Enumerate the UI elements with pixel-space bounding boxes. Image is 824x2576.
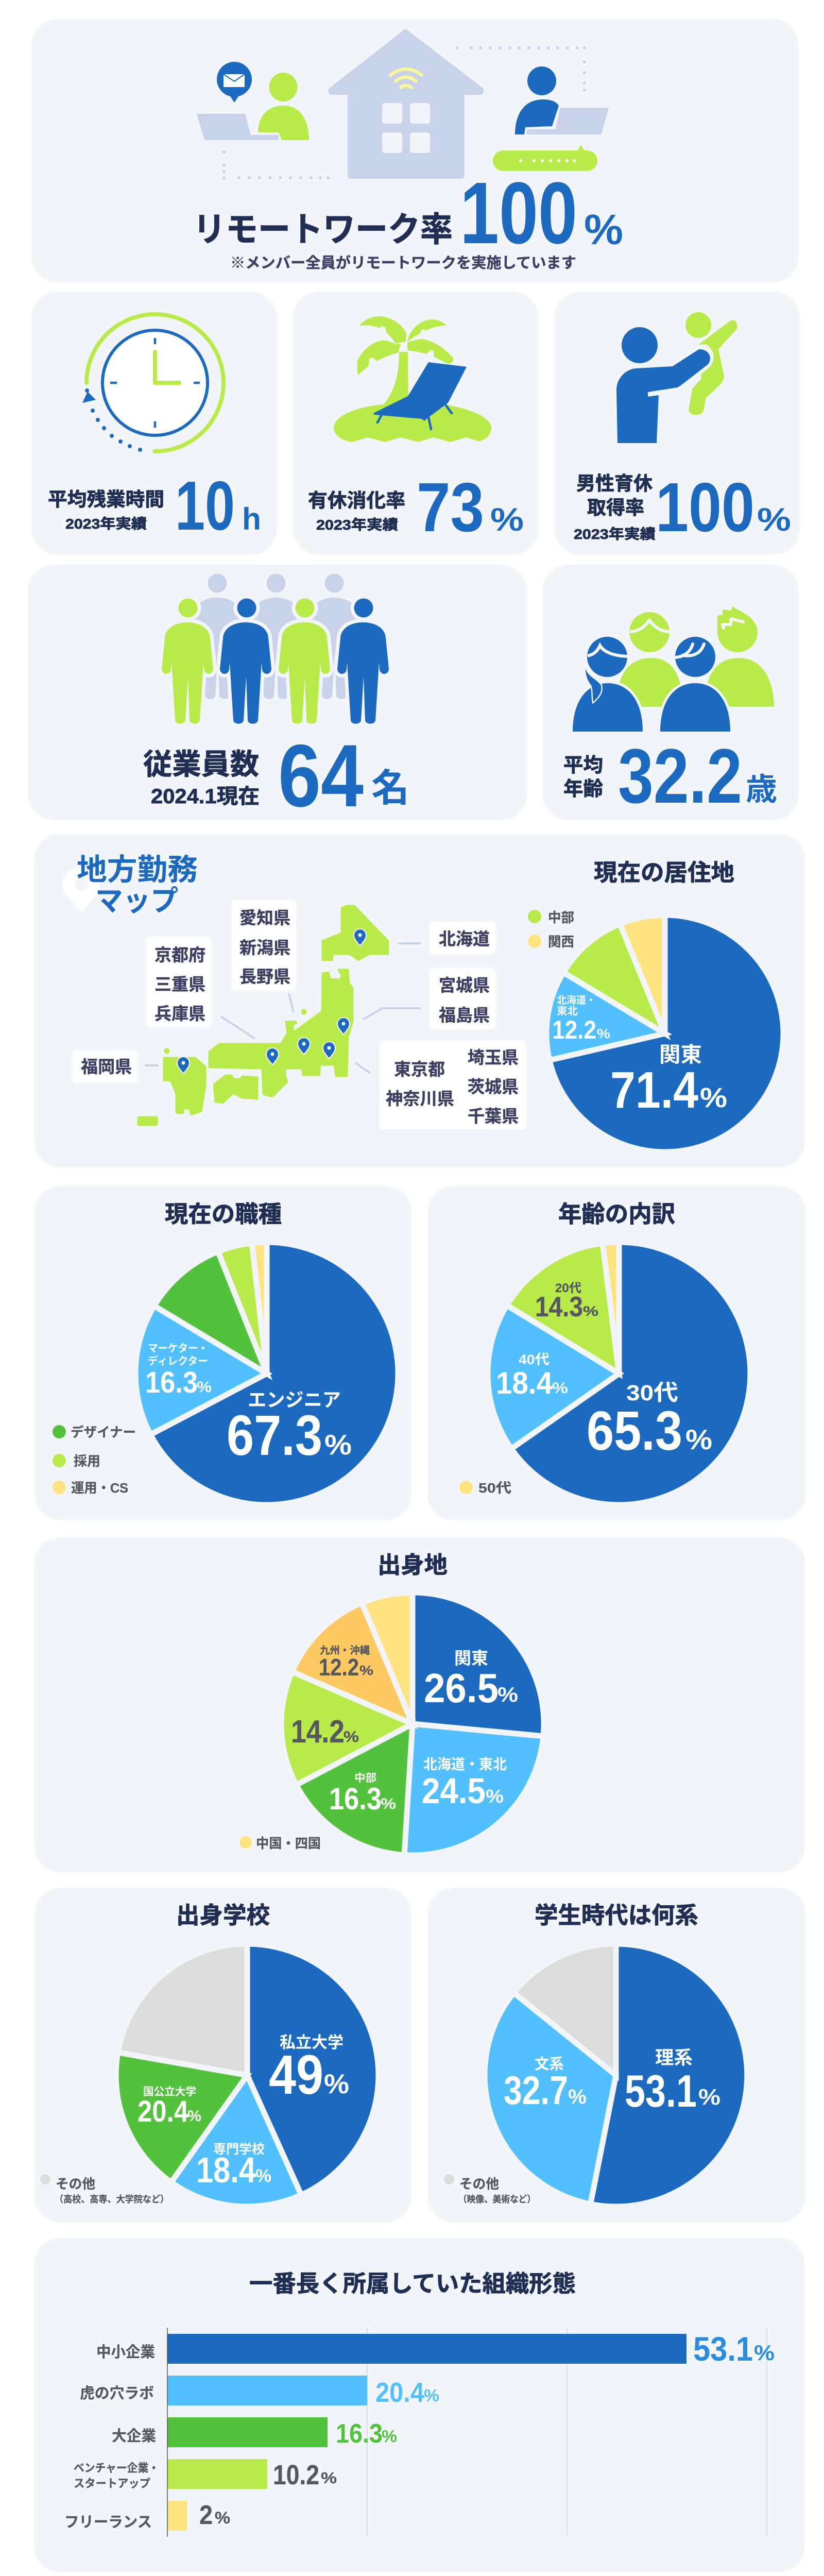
bar values: 53.1 [693, 2330, 753, 2368]
slice label: Hokkaido Tohoku 12.2%: % [597, 1026, 610, 1041]
label box: Kyoto, Mie, Hyogo [146, 937, 211, 1027]
slice label: marketer director 16.3%: % [197, 1379, 212, 1396]
slice label: Kanto 71.4%: % [700, 1082, 727, 1113]
label box: Kanto prefectures: 茨城県 [468, 1077, 519, 1096]
label [574, 473, 656, 542]
slice label: marketer director 16.3%: ディレクター [148, 1355, 208, 1367]
slice label: vocational school 18.4%: 専門学校 [213, 2142, 265, 2157]
slice label: public university 20.4%: % [187, 2108, 201, 2125]
slice label: public university 20.4%: 国公立大学 [143, 2086, 196, 2098]
slice label: Hokkaido Tohoku 12.2%: 12.2 [552, 1015, 596, 1044]
label [563, 755, 603, 800]
slice label: Kanto 26.5%: 関東 [454, 1649, 488, 1668]
legend: residence: 関西 [548, 934, 574, 950]
note: ※メンバー全員がリモートワークを実施しています [230, 254, 576, 272]
slice label: humanities 32.7%: 文系 [535, 2056, 564, 2073]
slice label: Hokkaido Tohoku 12.2%: 北海道・ [557, 994, 596, 1006]
slice label: 14.2%: 14.2 [291, 1714, 345, 1750]
slice label: Hokkaido Tohoku 12.2% [552, 994, 610, 1044]
panel: age breakdown [427, 1186, 805, 1520]
label box: Kanto prefectures: 東京都 [394, 1060, 445, 1079]
heading: regional map: 地方勤務 [77, 853, 198, 887]
bar labels: ベンチャー企業・ [74, 2462, 159, 2475]
bar labels: スタートアップ [74, 2477, 150, 2490]
bar values: 2 [199, 2500, 213, 2530]
bar values: % [321, 2469, 337, 2487]
legend: job types [53, 1425, 136, 1496]
slice label: 20s 14.3%: 14.3 [535, 1291, 583, 1323]
slice label: Kanto 26.5%: 26.5 [424, 1665, 499, 1711]
label: 平均残業時間 [48, 489, 164, 510]
slice label: 30s 65.3%: % [685, 1423, 712, 1455]
value: 64: 名 [371, 767, 409, 809]
slice label: marketer director 16.3%: マーケター・ [148, 1343, 208, 1354]
heading: current residence: 現在の居住地 [594, 859, 734, 886]
pie chart: academic field [485, 1944, 747, 2207]
value: 32.2: 歳 [746, 772, 777, 807]
label box: Miyagi, Fukushima: 宮城県 [439, 976, 490, 995]
bar values: % [382, 2427, 397, 2446]
slice label: Chubu 16.3%: % [381, 1795, 396, 1812]
panel: headcount [28, 565, 527, 825]
label box: Aichi, Niigata, Nagano: 長野県 [239, 967, 290, 986]
label box: Kanto prefectures: 埼玉県 [468, 1048, 519, 1067]
bar values: 20.4 [375, 2377, 424, 2408]
slice label: private university 49%: % [324, 2069, 349, 2099]
label [48, 489, 164, 532]
bar labels [64, 2344, 159, 2531]
heading: school: 出身学校 [176, 1902, 270, 1928]
label box: Aichi, Niigata, Nagano [232, 900, 296, 990]
slice label: engineer 67.3%: 67.3 [227, 1404, 322, 1467]
slice label: vocational school 18.4%: 18.4 [196, 2150, 256, 2190]
heading: job types: 現在の職種 [165, 1201, 282, 1227]
label [308, 490, 405, 533]
slice label: Kanto 71.4%: 71.4 [610, 1061, 698, 1119]
slice label: science 53.1% [625, 2047, 720, 2116]
slice label: Hokkaido Tohoku 24.5%: 北海道・東北 [423, 1756, 507, 1772]
label: 2023年実績 [65, 516, 147, 532]
bar values: 10.2 [273, 2460, 319, 2490]
slice label: Hokkaido Tohoku 12.2%: 東北 [557, 1005, 578, 1017]
label box: Fukuoka: 福岡県 [81, 1057, 132, 1076]
label box: Kyoto, Mie, Hyogo: 兵庫県 [154, 1004, 205, 1023]
slice label: Kyushu Okinawa 12.2%: 12.2 [319, 1654, 359, 1681]
label box: Kanto prefectures: 千葉県 [468, 1107, 519, 1126]
slice label: 40s 18.4%: % [552, 1380, 568, 1397]
bar values: % [424, 2386, 439, 2405]
slice label: marketer director 16.3%: 16.3 [145, 1366, 198, 1399]
label: 有休消化率 [308, 490, 405, 511]
legend: residence [528, 910, 574, 950]
panel: school background [35, 1888, 411, 2223]
slice label: 30s 65.3%: 30代 [626, 1381, 678, 1405]
slice label: Kyushu Okinawa 12.2%: 九州・沖縄 [320, 1645, 370, 1656]
bar chart: organization type [167, 2328, 767, 2537]
slice label: 14.2%: % [344, 1728, 359, 1745]
icon: four people [573, 606, 774, 732]
value: 73%: 73 [417, 468, 484, 546]
label box: Kyoto, Mie, Hyogo: 三重県 [154, 975, 205, 994]
icon: clock [82, 314, 224, 452]
slice label: science 53.1%: 53.1 [625, 2065, 697, 2116]
value: 100%: 100 [656, 468, 754, 546]
slice label: public university 20.4%: 20.4 [138, 2095, 188, 2128]
slice label: Kanto 26.5% [424, 1649, 518, 1711]
bar values [199, 2330, 775, 2530]
legend: age: 50代 [478, 1480, 511, 1496]
slice label: private university 49%: 私立大学 [280, 2033, 344, 2052]
legend: school other: その他 [56, 2176, 95, 2192]
icon: palm island and deck chair [334, 316, 491, 442]
label box: Miyagi, Fukushima: 福島県 [439, 1006, 490, 1025]
slice label: engineer 67.3%: % [324, 1429, 352, 1461]
panel: paid leave usage [293, 292, 539, 555]
slice label: humanities 32.7%: 32.7 [504, 2067, 568, 2113]
slice label: Chubu 16.3%: 中部 [354, 1772, 376, 1784]
label box: Aichi, Niigata, Nagano: 愛知県 [239, 908, 290, 927]
label box: Hokkaido: 北海道 [439, 929, 490, 948]
headline: remote work rate 100%: % [584, 206, 623, 253]
label [143, 748, 260, 808]
panel: job types [35, 1186, 411, 1520]
slice label: 40s 18.4%: 18.4 [496, 1366, 553, 1400]
bar labels: 虎の穴ラボ [80, 2385, 154, 2402]
legend: job types: 採用 [74, 1453, 100, 1469]
label: 従業員数 [143, 748, 259, 781]
slice label: 30s 65.3% [587, 1381, 712, 1462]
slice label: Hokkaido Tohoku 24.5%: % [486, 1786, 504, 1807]
pie chart: hometown [281, 1592, 544, 1855]
slice label: 40s 18.4%: 40代 [519, 1352, 550, 1367]
slice label: Kanto 71.4% [610, 1043, 727, 1119]
legend: job types: デザイナー [71, 1425, 136, 1440]
headline: remote work rate 100% [193, 164, 623, 262]
panel: longest organization type [34, 2238, 805, 2572]
heading: 一番長く所属していた組織形態 [249, 2270, 576, 2297]
heading: regional map: マップ [95, 885, 178, 917]
slice label: 20s 14.3% [535, 1281, 598, 1323]
slice label: Hokkaido Tohoku 24.5% [422, 1756, 507, 1811]
legend: job types: 運用・CS [71, 1480, 128, 1496]
legend: field other: （映像、美術など） [458, 2194, 536, 2205]
map of Japan [138, 906, 421, 1125]
slice label: Hokkaido Tohoku 24.5%: 24.5 [422, 1771, 486, 1811]
legend: school other: （高校、高専、大学院など） [55, 2194, 169, 2205]
value: 73%: % [490, 502, 524, 538]
slice label: 30s 65.3%: 65.3 [587, 1399, 682, 1462]
panel: regional work map and residence [34, 834, 805, 1167]
value: 100%: % [757, 502, 791, 538]
label box: Kanto prefectures [380, 1041, 526, 1129]
legend: field other: その他 [459, 2176, 499, 2192]
label box: Fukuoka [73, 1050, 138, 1083]
value: 64: 64 [278, 726, 364, 825]
panel: average overtime [31, 292, 277, 555]
illustration: house with remote workers [197, 29, 609, 179]
value: 10h: h [242, 502, 261, 536]
headline: remote work rate 100%: リモートワーク率 [193, 210, 453, 248]
slice label: private university 49%: 49 [269, 2043, 323, 2106]
legend: school other [40, 2174, 169, 2205]
label box: Kyoto, Mie, Hyogo: 京都府 [154, 945, 205, 964]
headline: remote work rate 100%: 100 [460, 164, 577, 262]
legend: residence: 中部 [548, 910, 574, 925]
pie chart: residence [546, 915, 783, 1152]
label box: Hokkaido [430, 922, 495, 954]
bar labels: 中小企業 [96, 2344, 155, 2361]
icon: parent lifting child [616, 312, 737, 443]
slice label: 20s 14.3%: % [583, 1303, 598, 1319]
heading: regional map [77, 853, 198, 917]
bar values: % [215, 2509, 230, 2527]
label: 2023年実績 [574, 527, 656, 542]
bar labels: フリーランス [64, 2514, 152, 2531]
label box: Aichi, Niigata, Nagano: 新潟県 [239, 938, 290, 957]
bar values: 16.3 [336, 2419, 383, 2449]
bar values: % [754, 2341, 775, 2365]
label: 2024.1現在 [151, 785, 260, 808]
value: 10h: 10 [175, 467, 235, 545]
slice label: science 53.1%: 理系 [655, 2047, 693, 2068]
slice label: engineer 67.3%: エンジニア [248, 1389, 341, 1411]
panel: average age [542, 565, 799, 820]
panel: academic field [427, 1888, 805, 2223]
heading: academic field: 学生時代は何系 [535, 1902, 698, 1928]
icon: group of people [162, 574, 389, 724]
slice label: vocational school 18.4%: % [255, 2166, 271, 2186]
label box: Kanto prefectures: 神奈川県 [386, 1089, 454, 1108]
slice label: 40s 18.4% [496, 1352, 568, 1400]
slice label: private university 49% [269, 2033, 349, 2106]
label: 年齢 [563, 778, 603, 800]
slice label: Kanto 71.4%: 関東 [659, 1043, 702, 1066]
label: 取得率 [587, 497, 644, 518]
slice label: Chubu 16.3%: 16.3 [329, 1782, 382, 1816]
panel: hometown [34, 1537, 805, 1872]
panel: paternity leave [554, 292, 800, 555]
label: 2023年実績 [316, 517, 398, 533]
slice label: Kyushu Okinawa 12.2% [319, 1645, 373, 1681]
pie chart: job types [135, 1242, 398, 1505]
legend: age [459, 1480, 511, 1496]
value: 32.2: 32.2 [618, 733, 742, 819]
legend: field other [444, 2174, 536, 2205]
bar labels: 大企業 [112, 2428, 156, 2445]
label box: Miyagi, Fukushima [430, 968, 495, 1029]
legend: hometown: 中国・四国 [256, 1836, 321, 1851]
icon: location pin background [63, 868, 100, 913]
label: 平均 [563, 755, 603, 776]
label: 男性育休 [576, 473, 653, 494]
slice label: marketer director 16.3% [145, 1343, 212, 1399]
slice label: Kyushu Okinawa 12.2%: % [359, 1663, 373, 1678]
slice label: humanities 32.7%: % [568, 2086, 587, 2108]
panel: remote work rate [31, 19, 799, 282]
slice label: science 53.1%: % [698, 2084, 720, 2110]
heading: age breakdown: 年齢の内訳 [558, 1201, 675, 1227]
heading: hometown: 出身地 [377, 1552, 448, 1578]
slice label: Kanto 26.5%: % [497, 1683, 518, 1706]
pie chart: school [116, 1944, 379, 2207]
slice label: 20s 14.3%: 20代 [555, 1281, 581, 1295]
pie chart: age [488, 1242, 750, 1505]
